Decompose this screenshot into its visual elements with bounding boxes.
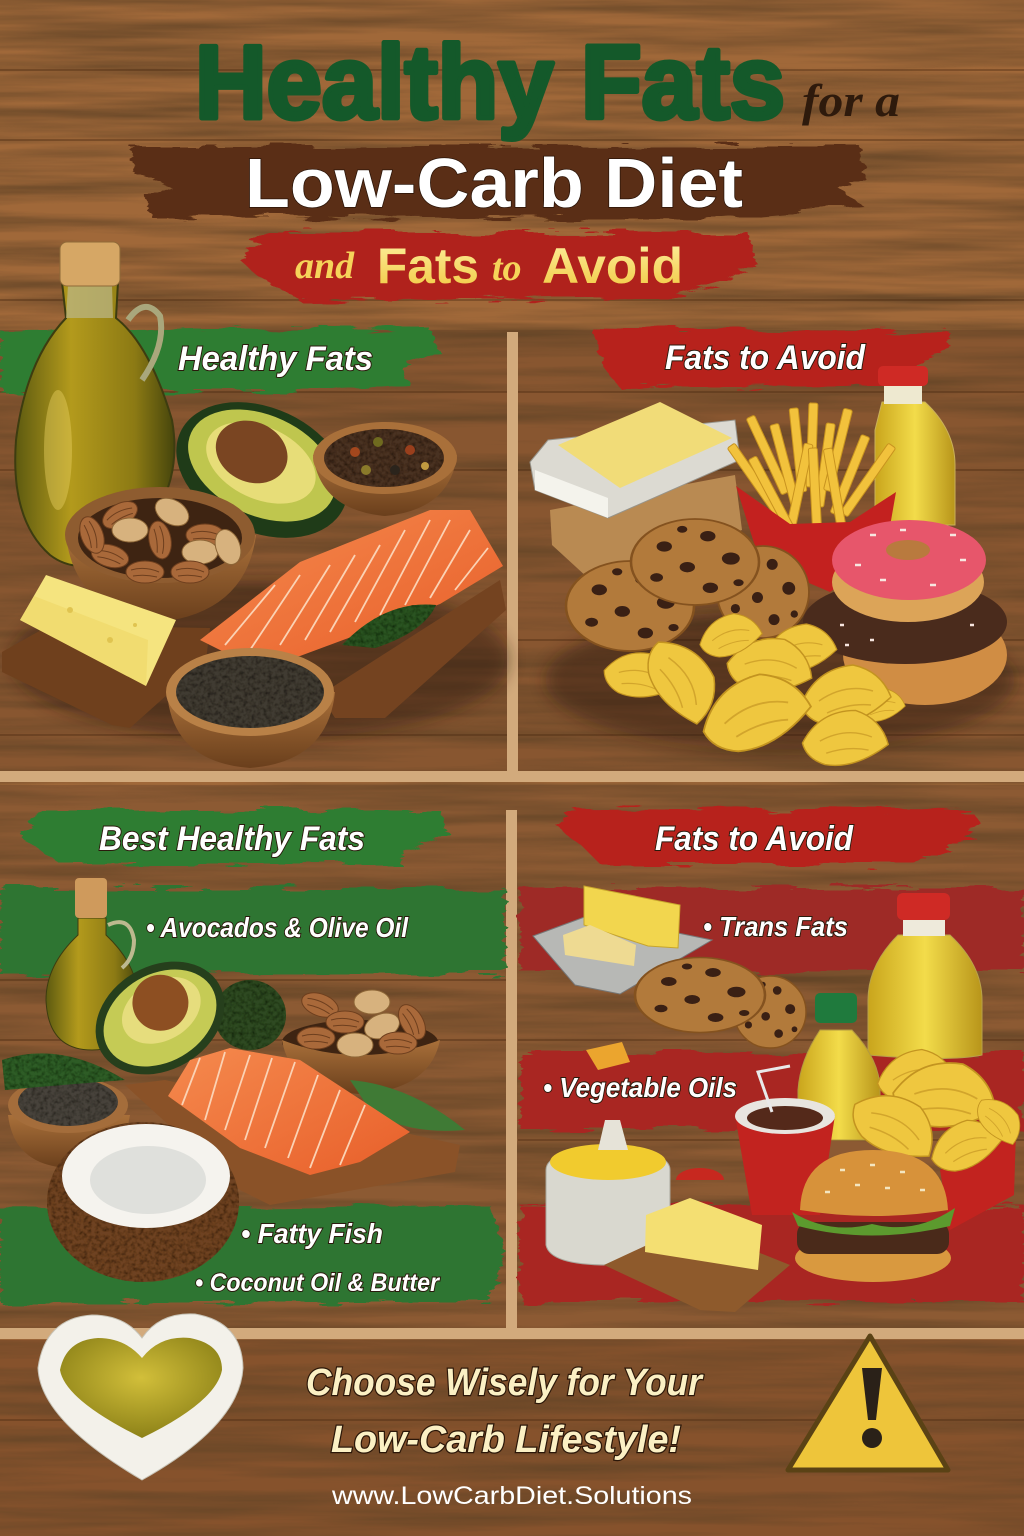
icon: cookies [566,519,809,651]
title: and Fats to Avoid: Fats [377,238,479,294]
icon: nuts bowl small [282,988,440,1094]
title: and Fats to Avoid: and [295,245,355,287]
band: green fatty fish row [0,1205,505,1303]
panel: footer [38,1314,948,1510]
icon: bowl of mixed seeds [313,422,457,516]
banner: Fats to Avoid: Fats to Avoid [665,339,866,377]
text: Choose Wisely: Choose Wisely for Your [306,1362,704,1404]
title: and Fats to Avoid: Avoid [542,238,683,294]
icon: nuts bowl [65,487,256,622]
panel: fats to avoid top [530,328,1015,771]
icon: french fries [727,403,896,592]
icon: jar of fat [546,1120,670,1265]
icon: cookies [635,958,806,1048]
banner: Healthy Fats [0,328,438,392]
title [130,25,900,300]
icon: butter on board [2,575,210,728]
banner: Fats to Avoid [592,328,950,388]
title: Healthy Fats: Healthy Fats [195,25,785,141]
icon: whole avocado [214,980,286,1050]
icon: warning triangle [788,1336,948,1470]
icon: chia seeds bowl [166,648,335,768]
icon: small oil bottle [798,993,880,1140]
icon: wrapped butter [530,402,742,578]
icon: large oil bottle [868,893,982,1058]
icon: avocado [154,376,370,564]
icon: coconut half [47,1122,239,1282]
label: Coconut Oil & Butter: • Coconut Oil & Butter [195,1269,440,1297]
label: Fatty Fish: • Fatty Fish [241,1218,383,1249]
banner: Best Healthy Fats [22,810,448,864]
title: and Fats to Avoid [295,238,683,294]
label: Vegetable Oils: • Vegetable Oils [543,1072,737,1103]
icon: heart dish of olive oil [38,1314,243,1480]
banner: Healthy Fats: Healthy Fats [178,340,373,378]
icon: oil bottle [875,366,955,525]
panel: best healthy fats [0,810,505,1303]
band: red bottom row [520,1205,1024,1302]
label: Avocados & Olive Oil: • Avocados & Olive Oil [146,912,409,943]
icon: chips in carton [842,1049,1024,1230]
text: website: www.LowCarbDiet.Solutions [331,1482,692,1510]
panel: fats to avoid bottom [520,808,1024,1312]
banner: red brush stroke [240,232,756,300]
banner: Fats to Avoid: Fats to Avoid [655,820,854,858]
icon: salmon on board [200,510,506,718]
band: green avocados row [0,888,505,974]
dividers [0,332,1024,1339]
icon: butter on board [604,1168,790,1312]
icon: potato chips [599,611,905,771]
banner: Fats to Avoid [556,808,982,864]
text: Low-Carb Lifestyle: Low-Carb Lifestyle! [331,1419,681,1461]
banner: Best Healthy Fats: Best Healthy Fats [99,820,365,858]
panel: healthy fats top [0,242,510,768]
banner: dark wood brush stroke [130,146,866,220]
title: for a: for a [802,75,900,126]
icon: stacked donuts [803,520,1007,705]
band: red vegetable oils row [520,1052,1024,1130]
shadow: food group [10,580,510,740]
icon: cutting board with salmon [125,1048,465,1205]
title: and Fats to Avoid: to [492,247,522,289]
shadow: food group [545,610,1015,750]
icon: chia bowl small [2,1053,130,1168]
icon: butter chunk [586,1042,630,1070]
label: Trans Fats: • Trans Fats [703,911,848,942]
icon: halved avocado [75,939,245,1097]
icon: red soda cup [735,1066,835,1215]
icon: olive oil bottle [15,242,174,566]
icon: small olive oil bottle [46,878,138,1050]
icon: butter tray [533,886,712,994]
icon: burger [792,1150,955,1282]
title: Low-Carb Diet: Low-Carb Diet [245,144,743,222]
band: red trans fats row [520,888,1024,972]
